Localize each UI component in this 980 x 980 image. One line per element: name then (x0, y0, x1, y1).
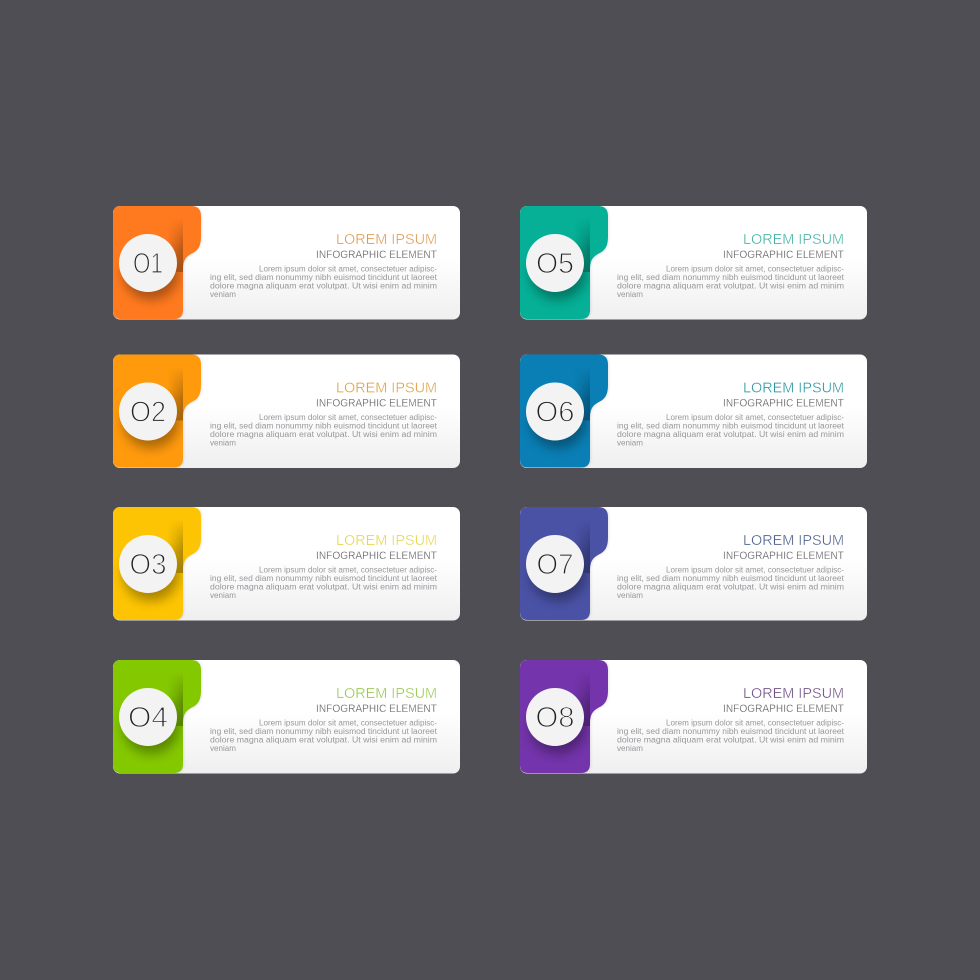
number badge 01 (119, 234, 177, 292)
text block 01: Lorem ipsum dolor sit amet, consectetuer adipisc- (259, 264, 437, 274)
tab 05 (520, 206, 609, 319)
text block 07: dolore magna aliquam erat volutpat. Ut wisi enim ad minim (617, 582, 844, 592)
number badge 08 (526, 688, 584, 746)
tab 03 (113, 507, 202, 620)
text block 06: Lorem ipsum dolor sit amet, consectetuer adipisc- (666, 413, 844, 422)
number badge 07: O7 (536, 549, 574, 581)
text block 02: INFOGRAPHIC ELEMENT (316, 398, 437, 410)
text block 01: veniam (210, 290, 236, 299)
number badge 04: O4 (128, 702, 168, 734)
card 02 (113, 354, 460, 468)
number badge 05: O5 (536, 248, 574, 280)
number badge 03 (119, 535, 177, 593)
tab 06 (520, 354, 609, 468)
tab 07 (520, 507, 609, 620)
text block 01 (210, 232, 438, 299)
text block 04: Lorem ipsum dolor sit amet, consectetuer adipisc- (259, 718, 437, 728)
text block 08: dolore magna aliquam erat volutpat. Ut wisi enim ad minim (617, 736, 844, 744)
text block 08: LOREM IPSUM (743, 686, 844, 702)
number badge 02 (119, 382, 177, 440)
number badge 05 (526, 234, 584, 292)
text block 02: veniam (210, 438, 236, 448)
text block 08 (617, 686, 845, 753)
text block 03: veniam (210, 591, 236, 600)
text block 05: LOREM IPSUM (743, 232, 844, 248)
text block 01: ing elit, sed diam nonummy nibh euismod tincidunt ut laoreet (210, 273, 438, 282)
text block 07: INFOGRAPHIC ELEMENT (723, 550, 844, 562)
card 07 (520, 507, 867, 620)
text block 04: veniam (210, 744, 236, 753)
number badge 07 (526, 535, 584, 593)
text block 04: ing elit, sed diam nonummy nibh euismod tincidunt ut laoreet (210, 727, 438, 736)
text block 07: LOREM IPSUM (743, 533, 844, 549)
text block 05: veniam (617, 290, 643, 299)
number badge 02: O2 (130, 396, 166, 428)
text block 05 (617, 232, 845, 299)
text block 06: INFOGRAPHIC ELEMENT (723, 398, 844, 410)
card 04 (113, 660, 460, 774)
card 05 (520, 206, 867, 320)
text block 03: Lorem ipsum dolor sit amet, consectetuer adipisc- (259, 566, 437, 574)
number badge 01: O1 (133, 248, 163, 280)
text block 06: LOREM IPSUM (743, 380, 844, 396)
text block 02 (210, 380, 438, 448)
text block 04: INFOGRAPHIC ELEMENT (316, 703, 437, 715)
number badge 03: O3 (130, 549, 166, 581)
card 06 (520, 354, 867, 468)
card 03 (113, 507, 460, 620)
card 01 (113, 206, 460, 320)
card 08 (520, 660, 867, 774)
text block 07: Lorem ipsum dolor sit amet, consectetuer adipisc- (666, 566, 844, 574)
text block 02: LOREM IPSUM (336, 380, 437, 396)
text block 03: ing elit, sed diam nonummy nibh euismod tincidunt ut laoreet (210, 574, 438, 583)
text block 07 (617, 533, 845, 600)
number badge 08: O8 (536, 702, 574, 734)
text block 01: dolore magna aliquam erat volutpat. Ut wisi enim ad minim (210, 282, 437, 290)
text block 08: Lorem ipsum dolor sit amet, consectetuer adipisc- (666, 718, 844, 728)
tab 02 (113, 354, 202, 468)
infographic canvas (113, 206, 867, 774)
text block 05: INFOGRAPHIC ELEMENT (723, 249, 844, 261)
text block 04 (210, 686, 438, 753)
text block 06: ing elit, sed diam nonummy nibh euismod tincidunt ut laoreet (617, 422, 845, 430)
number badge 06 (526, 382, 584, 440)
text block 05: dolore magna aliquam erat volutpat. Ut wisi enim ad minim (617, 282, 844, 290)
tab 04 (113, 660, 202, 773)
text block 01: LOREM IPSUM (336, 232, 437, 248)
text block 03 (210, 533, 438, 600)
text block 07: ing elit, sed diam nonummy nibh euismod tincidunt ut laoreet (617, 574, 845, 583)
tab 08 (520, 660, 609, 773)
text block 03: LOREM IPSUM (336, 533, 437, 549)
text block 08: ing elit, sed diam nonummy nibh euismod tincidunt ut laoreet (617, 727, 845, 736)
text block 03: INFOGRAPHIC ELEMENT (316, 550, 437, 562)
text block 02: ing elit, sed diam nonummy nibh euismod tincidunt ut laoreet (210, 422, 438, 430)
text block 05: ing elit, sed diam nonummy nibh euismod tincidunt ut laoreet (617, 273, 845, 282)
text block 06: dolore magna aliquam erat volutpat. Ut wisi enim ad minim (617, 430, 844, 439)
text block 08: veniam (617, 744, 643, 753)
text block 02: dolore magna aliquam erat volutpat. Ut wisi enim ad minim (210, 430, 437, 439)
text block 03: dolore magna aliquam erat volutpat. Ut wisi enim ad minim (210, 582, 437, 592)
text block 08: INFOGRAPHIC ELEMENT (723, 703, 844, 715)
text block 05: Lorem ipsum dolor sit amet, consectetuer adipisc- (666, 264, 844, 274)
text block 04: dolore magna aliquam erat volutpat. Ut wisi enim ad minim (210, 736, 437, 744)
number badge 06: O6 (536, 396, 574, 428)
text block 06: veniam (617, 438, 643, 448)
text block 06 (617, 380, 845, 448)
text block 01: INFOGRAPHIC ELEMENT (316, 249, 437, 261)
tab 01 (113, 206, 202, 319)
text block 07: veniam (617, 591, 643, 600)
number badge 04 (119, 688, 177, 746)
text block 02: Lorem ipsum dolor sit amet, consectetuer adipisc- (259, 413, 437, 422)
text block 04: LOREM IPSUM (336, 686, 437, 702)
